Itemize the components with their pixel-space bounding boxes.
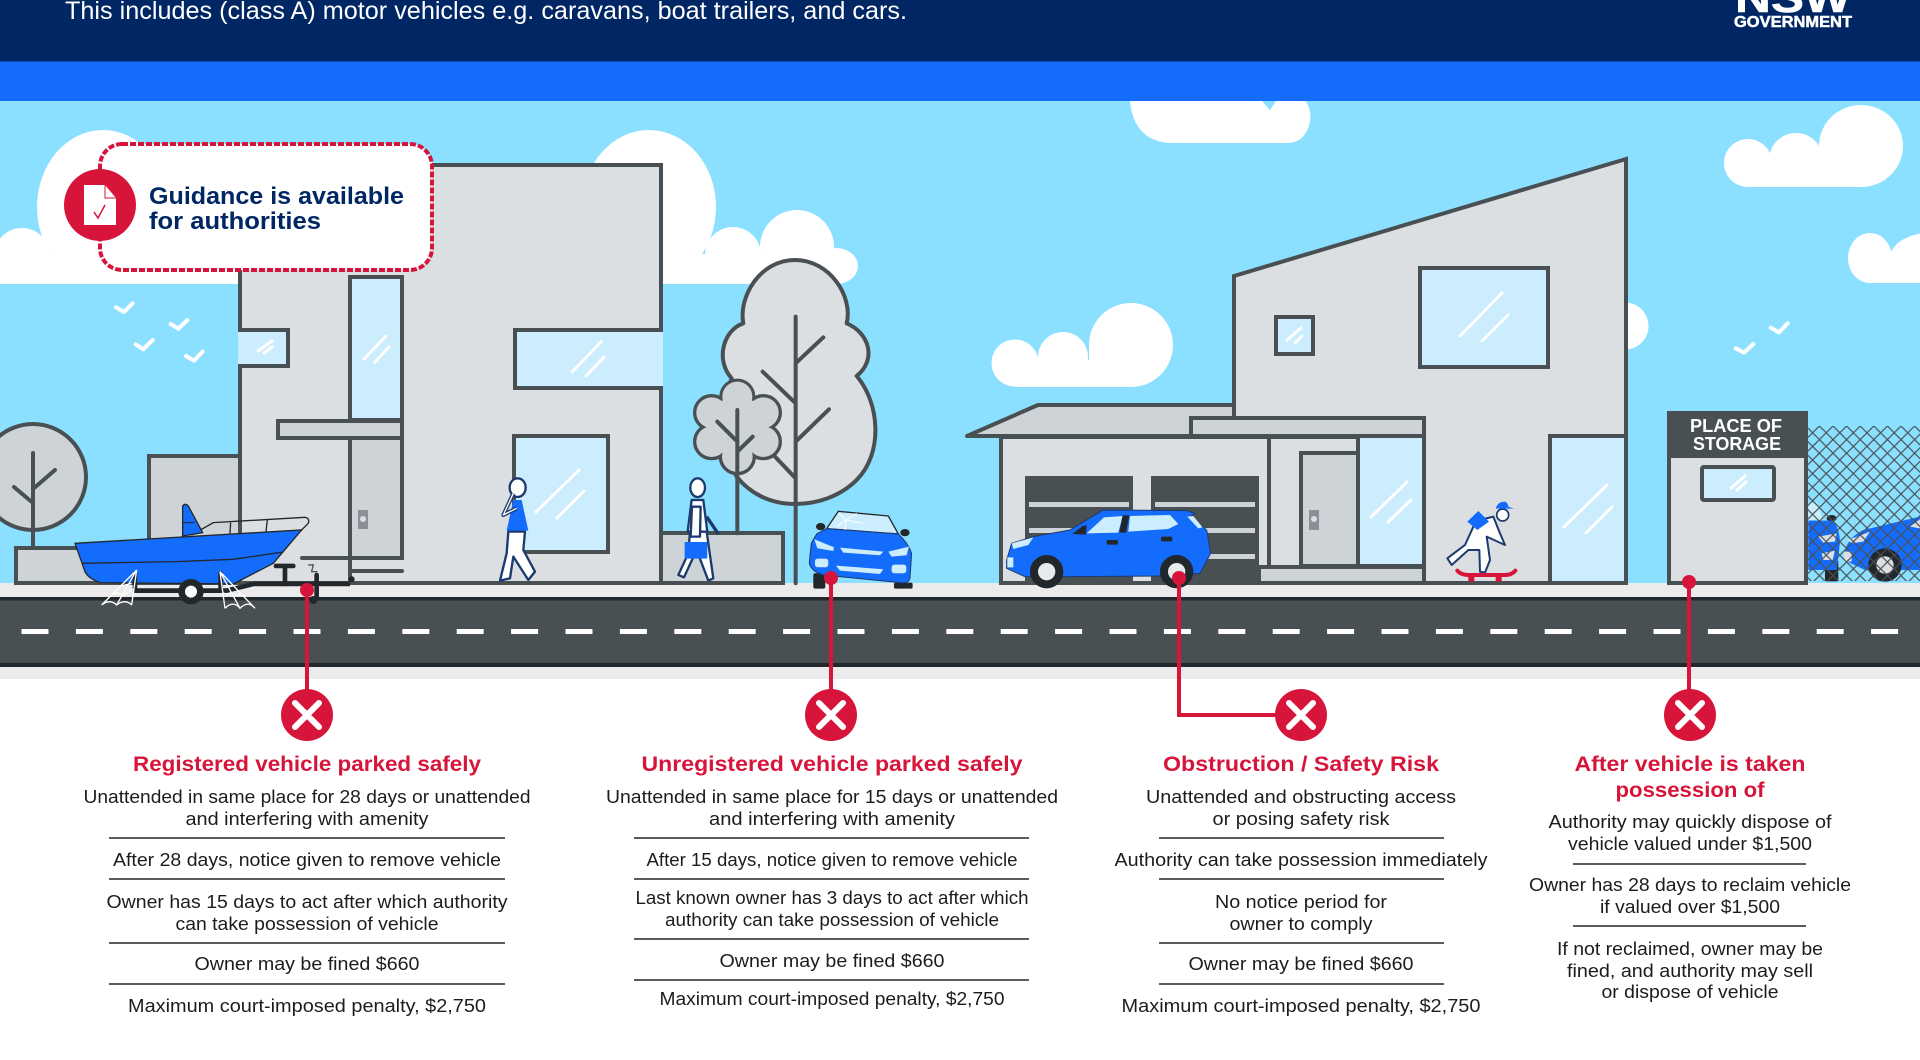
person: pedestrian with blue bag <box>678 478 718 581</box>
text list: Maximum court-imposed penalty, $2,750 <box>660 988 1004 1009</box>
text list: Owner has 28 days to reclaim vehicle <box>1529 874 1851 895</box>
tree: small <box>695 381 780 533</box>
vehicle: boat on trailer <box>75 504 355 608</box>
text list: After 28 days, notice given to remove vehicle <box>113 849 501 870</box>
heading: possession of <box>1616 778 1765 802</box>
text list: Authority may quickly dispose of <box>1548 811 1832 832</box>
text list: owner to comply <box>1230 913 1373 934</box>
icon: red cross <box>281 689 333 741</box>
vehicle: blue car with cracked windscreen <box>809 511 913 589</box>
callout text <box>149 183 404 235</box>
text list: or posing safety risk <box>1212 808 1390 829</box>
icon: red cross <box>1275 689 1327 741</box>
marker dot <box>824 571 838 585</box>
tree: left round <box>0 424 86 548</box>
clouds <box>0 101 1920 387</box>
text list: if valued over $1,500 <box>1600 896 1780 917</box>
garage doors <box>1025 476 1259 583</box>
blue stripe <box>0 62 1920 102</box>
lower window <box>514 436 608 552</box>
text list: Maximum court-imposed penalty, $2,750 <box>1122 995 1480 1016</box>
main wall <box>240 165 661 583</box>
porch window <box>1358 436 1424 566</box>
callout text: Guidance is available <box>149 183 404 210</box>
planter and side boxes <box>16 456 302 583</box>
spider webs <box>102 570 255 608</box>
square window <box>1276 317 1313 354</box>
marker dot <box>300 583 314 597</box>
building: left house <box>16 165 663 583</box>
sky <box>0 101 1920 583</box>
storage sign: PLACE OF <box>1690 415 1782 436</box>
icon: red cross <box>805 689 857 741</box>
person: thinking pedestrian <box>500 478 535 581</box>
cars behind fence <box>1808 503 1920 581</box>
callout: guidance <box>64 144 432 270</box>
hull <box>75 530 302 584</box>
storage sign <box>1667 411 1808 458</box>
porch post <box>1267 436 1271 566</box>
text list: and interfering with amenity <box>709 808 956 829</box>
cloud notch <box>1262 101 1276 110</box>
column 3: obstruction <box>1114 571 1488 1016</box>
garage wall <box>1001 437 1424 583</box>
text list: vehicle valued under $1,500 <box>1568 833 1812 854</box>
step <box>1259 567 1424 583</box>
windscreen <box>192 517 309 535</box>
tree: big <box>723 260 875 583</box>
header band <box>0 0 1920 62</box>
storage sign: STORAGE <box>1693 433 1781 454</box>
fin <box>183 504 203 536</box>
text list: Unattended and obstructing access <box>1146 786 1456 807</box>
big window <box>1420 268 1548 367</box>
vehicle: blue SUV <box>1007 510 1211 584</box>
chain-link fence <box>1808 426 1920 581</box>
text list <box>84 786 530 1016</box>
heading: Obstruction / Safety Risk <box>1163 752 1439 776</box>
text list: If not reclaimed, owner may be <box>1557 938 1823 959</box>
tall lower window <box>1550 436 1626 583</box>
marker dot <box>1682 575 1696 589</box>
heading <box>1574 752 1806 802</box>
planter 2 <box>661 533 783 583</box>
marker dot <box>1172 571 1186 585</box>
text list: or dispose of vehicle <box>1602 981 1778 1002</box>
steps <box>302 558 402 583</box>
building: right house <box>967 159 1626 583</box>
canopy <box>278 421 402 438</box>
birds right <box>1736 323 1788 353</box>
text list: and interfering with amenity <box>186 808 429 829</box>
text list: After 15 days, notice given to remove vehicle <box>646 849 1018 870</box>
text list: Owner may be fined $660 <box>194 953 420 974</box>
text list: No notice period for <box>1215 891 1387 912</box>
connector lines <box>307 578 1689 715</box>
storage window <box>1702 467 1774 500</box>
column 4: after possession <box>1529 575 1851 1002</box>
icon: document check <box>64 169 136 241</box>
text list: Owner may be fined $660 <box>720 950 944 971</box>
door <box>350 438 402 558</box>
logo: NSW Government <box>1734 0 1853 31</box>
text list: Unattended in same place for 15 days or unattended <box>606 786 1058 807</box>
upper walls <box>1234 159 1626 583</box>
pavement <box>0 583 1920 597</box>
wide window <box>513 330 663 388</box>
place of storage building <box>1667 411 1808 583</box>
birds left <box>116 303 203 361</box>
tall window <box>350 277 402 420</box>
text list: Owner has 15 days to act after which authority <box>106 891 508 912</box>
heading: After vehicle is taken <box>1574 752 1806 776</box>
column 2: unregistered vehicle <box>606 571 1058 1009</box>
callout text: for authorities <box>149 208 321 235</box>
road <box>0 597 1920 679</box>
text list: Authority can take possession immediately <box>1114 849 1488 870</box>
garage roof <box>967 405 1234 436</box>
person: skateboarder <box>1447 502 1515 582</box>
column 1: registered vehicle <box>84 583 530 1016</box>
heading: Registered vehicle parked safely <box>133 752 481 776</box>
right house outline <box>1624 159 1628 583</box>
text list: Maximum court-imposed penalty, $2,750 <box>128 995 486 1016</box>
heading: Unregistered vehicle parked safely <box>642 752 1023 776</box>
logo: NSW Government: GOVERNMENT <box>1734 14 1853 31</box>
small notch window <box>238 330 288 366</box>
text list <box>606 786 1058 1009</box>
text list: can take possession of vehicle <box>176 913 438 934</box>
text list: Unattended in same place for 28 days or unattended <box>84 786 530 807</box>
canopy <box>1191 418 1424 436</box>
text list <box>1529 811 1851 1002</box>
trailer <box>135 584 350 591</box>
text list: Last known owner has 3 days to act after which <box>636 887 1028 908</box>
icon: red cross <box>1664 689 1716 741</box>
text list: authority can take possession of vehicle <box>665 909 999 930</box>
text list: Owner may be fined $660 <box>1188 953 1414 974</box>
text list: fined, and authority may sell <box>1567 960 1813 981</box>
text list <box>1114 786 1488 1016</box>
porch door <box>1301 453 1358 566</box>
